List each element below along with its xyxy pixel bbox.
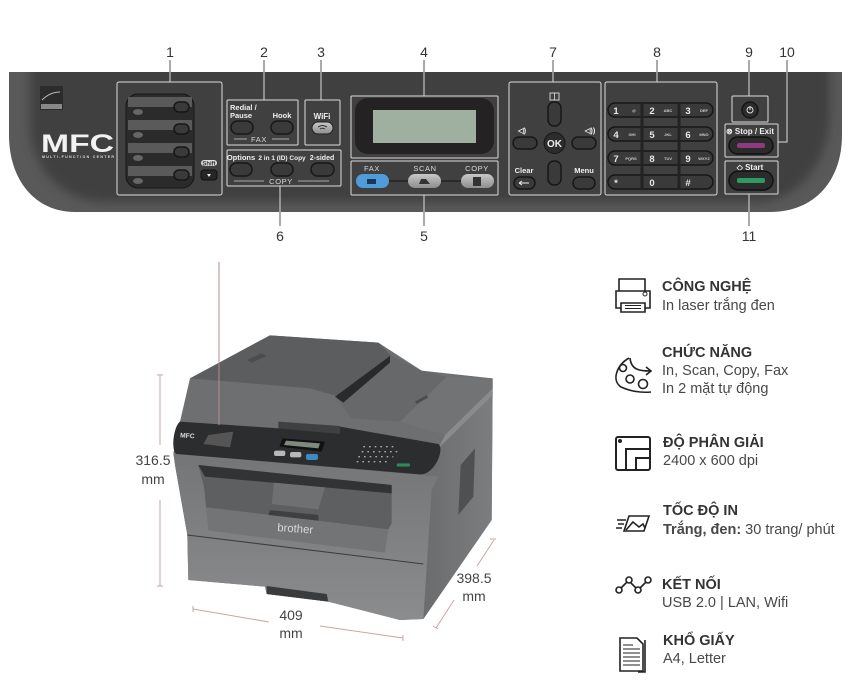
group 6: copy keys: 2-sided — [310, 155, 334, 162]
feeder slot — [335, 356, 390, 403]
callout numbers: 9 — [745, 44, 753, 60]
output bay — [198, 465, 392, 529]
group 8: dial pad: @ — [632, 108, 636, 113]
group 8: dial pad: PQRS — [625, 156, 637, 161]
icon: nested frames — [616, 437, 650, 470]
group 6: copy keys: Options — [227, 153, 255, 162]
group 11: start key: ◇ Start — [736, 163, 764, 172]
group 8: dial pad: 0 — [649, 178, 655, 189]
width dimension: mm — [279, 625, 303, 641]
lcd — [279, 438, 325, 452]
text: 2400 x 600 dpi — [663, 453, 758, 469]
printer silhouette — [173, 335, 493, 620]
output tray — [335, 356, 447, 422]
group 8: dial pad: MNO — [699, 132, 709, 137]
group 8: dial pad: WXYZ — [698, 156, 710, 161]
panel inner face — [30, 60, 830, 202]
panel text: MFC — [180, 432, 195, 440]
group 5: mode keys — [351, 161, 498, 195]
printer front — [174, 453, 438, 620]
vent — [458, 448, 475, 515]
height dimension: 316.5 — [135, 452, 171, 468]
heading: KẾT NỐI — [662, 575, 721, 593]
group 7: navigation keys — [509, 82, 601, 195]
group 7: navigation keys: ◁)) — [584, 126, 596, 135]
callout numbers: 6 — [276, 228, 284, 244]
leader lines — [170, 60, 787, 226]
group 2: fax keys — [227, 100, 298, 145]
feeder tab — [247, 353, 267, 363]
tray seam — [187, 535, 423, 564]
spec: connectivity — [616, 575, 788, 611]
group 9: power key — [732, 96, 768, 122]
group 4: LCD display — [351, 96, 498, 158]
group 1: one touch keys — [117, 82, 222, 195]
feed tab — [278, 422, 340, 434]
group 10: stop exit key — [725, 124, 778, 157]
panel keys — [203, 432, 410, 467]
group 7: navigation keys: OK — [547, 139, 563, 150]
icon: printer — [616, 279, 650, 312]
group 8: dial pad: TUV — [664, 156, 672, 161]
group 10: stop exit key: ⊗ Stop / Exit — [726, 127, 774, 136]
heading: ĐỘ PHÂN GIẢI — [663, 433, 764, 451]
width dimension — [193, 606, 403, 641]
group 8: dial pad: * — [614, 178, 618, 189]
tray handle — [267, 586, 328, 602]
group 7: navigation keys: Clear — [515, 166, 533, 175]
icon: document — [620, 638, 645, 672]
group 11: start key — [725, 161, 778, 194]
printer illustration — [173, 335, 493, 620]
heading: TỐC ĐỘ IN — [663, 501, 738, 519]
group 6: copy keys: COPY — [269, 177, 293, 186]
control panel diagram — [9, 44, 842, 244]
group 8: dial pad: 9 — [685, 154, 691, 165]
group 2: fax keys: Redial / — [230, 103, 258, 112]
tray tab — [415, 395, 428, 404]
group 8: dial pad: 7 — [613, 154, 619, 165]
MFC logo: MFC — [41, 130, 114, 158]
icon: speeding picture — [616, 516, 649, 531]
width dimension: 409 — [279, 607, 303, 623]
group 8: dial pad: ABC — [664, 108, 672, 113]
group 8: dial pad: 8 — [649, 154, 655, 165]
paper door — [206, 507, 388, 553]
group 6: copy keys — [227, 150, 341, 186]
group 8: dial pad: 5 — [649, 130, 655, 141]
scanner right rim — [438, 387, 493, 448]
callout numbers: 4 — [420, 44, 428, 60]
group 3: wifi key — [305, 100, 340, 145]
heading: CÔNG NGHỆ — [662, 277, 752, 295]
panel strip — [173, 422, 440, 474]
height dimension — [135, 375, 171, 586]
group 8: dial pad: 4 — [613, 130, 619, 141]
text: In, Scan, Copy, Fax — [662, 363, 789, 379]
spec: paper size — [620, 631, 735, 672]
spec: functions — [616, 343, 789, 397]
group 8: dial pad: JKL — [664, 132, 672, 137]
heading: KHỔ GIẤY — [663, 631, 735, 649]
text: In laser trắng đen — [662, 297, 775, 314]
depth dimension — [433, 539, 496, 629]
spec: print speed — [616, 501, 835, 538]
group 7: navigation keys: Menu — [574, 166, 594, 175]
depth dimension: mm — [462, 588, 486, 604]
keypad dots — [357, 447, 398, 462]
callout numbers: 5 — [420, 228, 428, 244]
group 6: copy keys: 2 in 1 (ID) Copy — [258, 155, 306, 162]
energy star logo — [40, 86, 63, 110]
callout numbers — [166, 44, 795, 244]
output flap — [272, 483, 325, 509]
group 8: dial pad — [605, 82, 717, 195]
callout numbers: 3 — [317, 44, 325, 60]
icon: network nodes — [616, 577, 651, 593]
callout numbers: 11 — [742, 228, 756, 244]
heading: CHỨC NĂNG — [662, 343, 752, 361]
callout numbers: 2 — [260, 44, 268, 60]
group 2: fax keys: FAX — [251, 135, 267, 144]
feeder top — [190, 335, 392, 396]
group 8: dial pad: DEF — [700, 108, 709, 113]
group 2: fax keys: Pause — [230, 111, 252, 120]
brand: brother — [277, 522, 314, 537]
height dimension: mm — [141, 471, 165, 487]
depth dimension: 398.5 — [456, 570, 492, 586]
group 8: dial pad: 3 — [685, 106, 691, 117]
group 2: fax keys: Hook — [273, 111, 292, 120]
spec: functions: In 2 mặt tự động — [662, 381, 768, 397]
callout numbers: 10 — [779, 44, 795, 60]
group 5: mode keys: COPY — [465, 164, 489, 173]
group 8: dial pad: # — [685, 178, 691, 189]
spec: resolution — [616, 433, 764, 470]
leader to printer — [218, 262, 220, 425]
door grip — [268, 510, 318, 521]
group 8: dial pad: 6 — [685, 130, 691, 141]
group 5: mode keys: FAX — [364, 164, 380, 173]
text: A4, Letter — [663, 651, 726, 667]
group 8: dial pad: GHI — [628, 132, 636, 137]
printer side — [423, 392, 493, 619]
group 3: wifi key: WiFi — [314, 112, 330, 121]
icon: gears — [616, 358, 651, 392]
panel body — [9, 72, 842, 212]
group 5: mode keys: SCAN — [413, 164, 437, 173]
bay shadow — [198, 465, 392, 493]
group 8: dial pad: 2 — [649, 106, 655, 117]
group 8: dial pad: 1 — [613, 106, 619, 117]
text: USB 2.0 | LAN, Wifi — [662, 595, 788, 611]
group 7: navigation keys: ◁) — [517, 126, 527, 135]
callout numbers: 1 — [166, 44, 174, 60]
scanner top right — [400, 377, 493, 435]
MFC logo: MULTI-FUNCTION CENTER — [42, 155, 114, 159]
group 1: one touch keys: Shift — [202, 162, 216, 168]
callout numbers: 8 — [653, 44, 661, 60]
callout numbers: 7 — [549, 44, 557, 60]
spec: technology — [616, 277, 775, 314]
text: Trắng, đen: 30 trang/ phút — [663, 520, 835, 538]
